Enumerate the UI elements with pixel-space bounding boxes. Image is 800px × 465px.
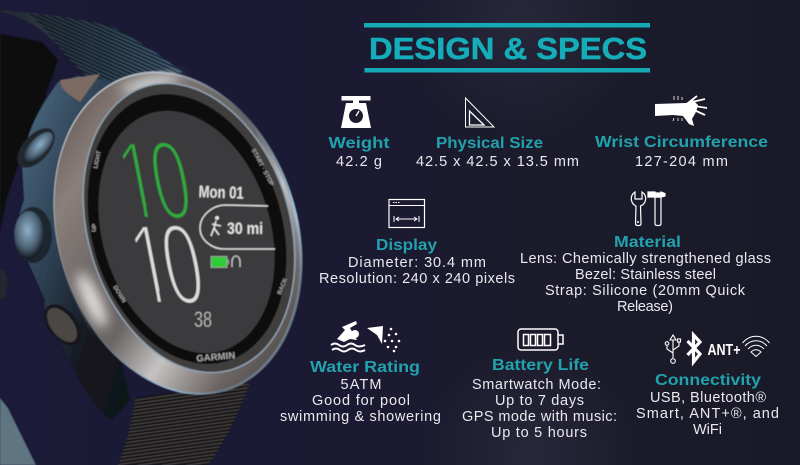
outer steel bezel bbox=[15, 40, 341, 426]
spec: battery life: Up to 5 hours bbox=[491, 425, 587, 441]
title: DESIGN & SPECS bbox=[369, 31, 647, 66]
white digits 10: 1 bbox=[120, 201, 183, 329]
watch illustration bbox=[0, 10, 341, 465]
spec: physical size: Physical Size bbox=[436, 135, 543, 152]
bezel labels: LIGHT bbox=[93, 150, 103, 169]
spec: physical size bbox=[416, 98, 579, 170]
seconds: 38 bbox=[194, 307, 212, 332]
inner gray bezel ring bbox=[49, 57, 329, 399]
spec: material: Release) bbox=[617, 299, 673, 315]
activity pill bbox=[200, 205, 275, 249]
green digits 10: 1 bbox=[108, 117, 169, 243]
spec: material bbox=[520, 192, 771, 315]
spec: wrist circumference: Wrist Circumference bbox=[595, 134, 768, 151]
spec: weight: Weight bbox=[328, 135, 390, 152]
green digits 10: 0 bbox=[140, 117, 201, 243]
spec: display bbox=[319, 200, 515, 287]
button: middle bbox=[14, 207, 52, 263]
lower strap bbox=[118, 382, 250, 465]
spec: battery life bbox=[462, 329, 617, 441]
spec: water rating bbox=[280, 321, 441, 425]
spec: connectivity: Connectivity bbox=[655, 372, 761, 389]
title bbox=[364, 23, 650, 72]
icon: set square bbox=[466, 98, 494, 127]
spec: material: Strap: Silicone (20mm Quick bbox=[545, 283, 746, 299]
spec: connectivity: WiFi bbox=[693, 422, 722, 438]
icon: wrench and hammer bbox=[631, 192, 665, 226]
bezel labels bbox=[92, 148, 289, 365]
spec: wrist circumference bbox=[595, 96, 768, 170]
icon: battery bbox=[518, 329, 563, 350]
spec: water rating: Water Rating bbox=[310, 359, 420, 376]
bezel labels: DOWN bbox=[111, 285, 126, 304]
icon: scale bbox=[341, 96, 371, 128]
watch case bbox=[18, 76, 130, 420]
spec: battery life: Up to 7 days bbox=[495, 393, 584, 409]
icon: bluetooth bbox=[688, 335, 700, 362]
spec: display: Diameter: 30.4 mm bbox=[348, 255, 486, 271]
activity pill: 30 mi bbox=[227, 219, 263, 238]
spec: weight bbox=[328, 96, 390, 170]
spec: weight: 42.2 g bbox=[336, 154, 382, 170]
spec: material: Lens: Chemically strengthened glass bbox=[520, 251, 771, 267]
button: top bbox=[10, 121, 62, 175]
white digits 10: 0 bbox=[151, 201, 214, 329]
spec: connectivity bbox=[636, 335, 779, 438]
date: Mon 01 bbox=[198, 182, 244, 203]
bezel labels: START · STOP bbox=[250, 148, 274, 187]
spec: material: Material bbox=[614, 234, 681, 251]
spec: physical size: 42.5 x 42.5 x 13.5 mm bbox=[416, 154, 579, 170]
spec: water rating: Good for pool bbox=[312, 393, 410, 409]
battery status bbox=[211, 256, 240, 268]
icon: usb bbox=[665, 335, 680, 363]
icon: swimmer bbox=[331, 321, 365, 352]
spec: connectivity: USB, Bluetooth® bbox=[650, 390, 766, 406]
bezel labels: UP bbox=[92, 223, 98, 232]
black chapter ring bbox=[56, 69, 318, 389]
spec: battery life: Battery Life bbox=[492, 357, 589, 374]
spec: battery life: GPS mode with music: bbox=[462, 409, 617, 425]
icon: ant+: ANT+ bbox=[708, 342, 740, 359]
spec: connectivity: Smart, ANT+®, and bbox=[636, 406, 779, 422]
bezel labels: BACK bbox=[277, 277, 289, 296]
spec: water rating: 5ATM bbox=[340, 377, 382, 393]
lower far strap bbox=[0, 398, 36, 465]
button: bottom bbox=[37, 297, 89, 353]
green digits 10 bbox=[108, 117, 201, 243]
bezel labels: GARMIN bbox=[196, 350, 236, 365]
icon: shower spray bbox=[367, 326, 400, 352]
spec: water rating: swimming & showering bbox=[280, 409, 441, 425]
screen bbox=[70, 89, 303, 375]
white digits 10 bbox=[120, 201, 214, 329]
spec: wrist circumference: 127-204 mm bbox=[635, 154, 728, 170]
icon: wrist bbox=[655, 96, 707, 126]
upper strap bbox=[0, 10, 182, 84]
spec: battery life: Smartwatch Mode: bbox=[472, 377, 601, 393]
icon: wifi bbox=[742, 336, 770, 356]
spec: display: Display bbox=[376, 237, 437, 254]
spec: material: Bezel: Stainless steel bbox=[575, 267, 716, 283]
far strap bbox=[0, 34, 58, 232]
spec: display: Resolution: 240 x 240 pixels bbox=[319, 271, 515, 287]
icon: display window bbox=[389, 200, 424, 228]
